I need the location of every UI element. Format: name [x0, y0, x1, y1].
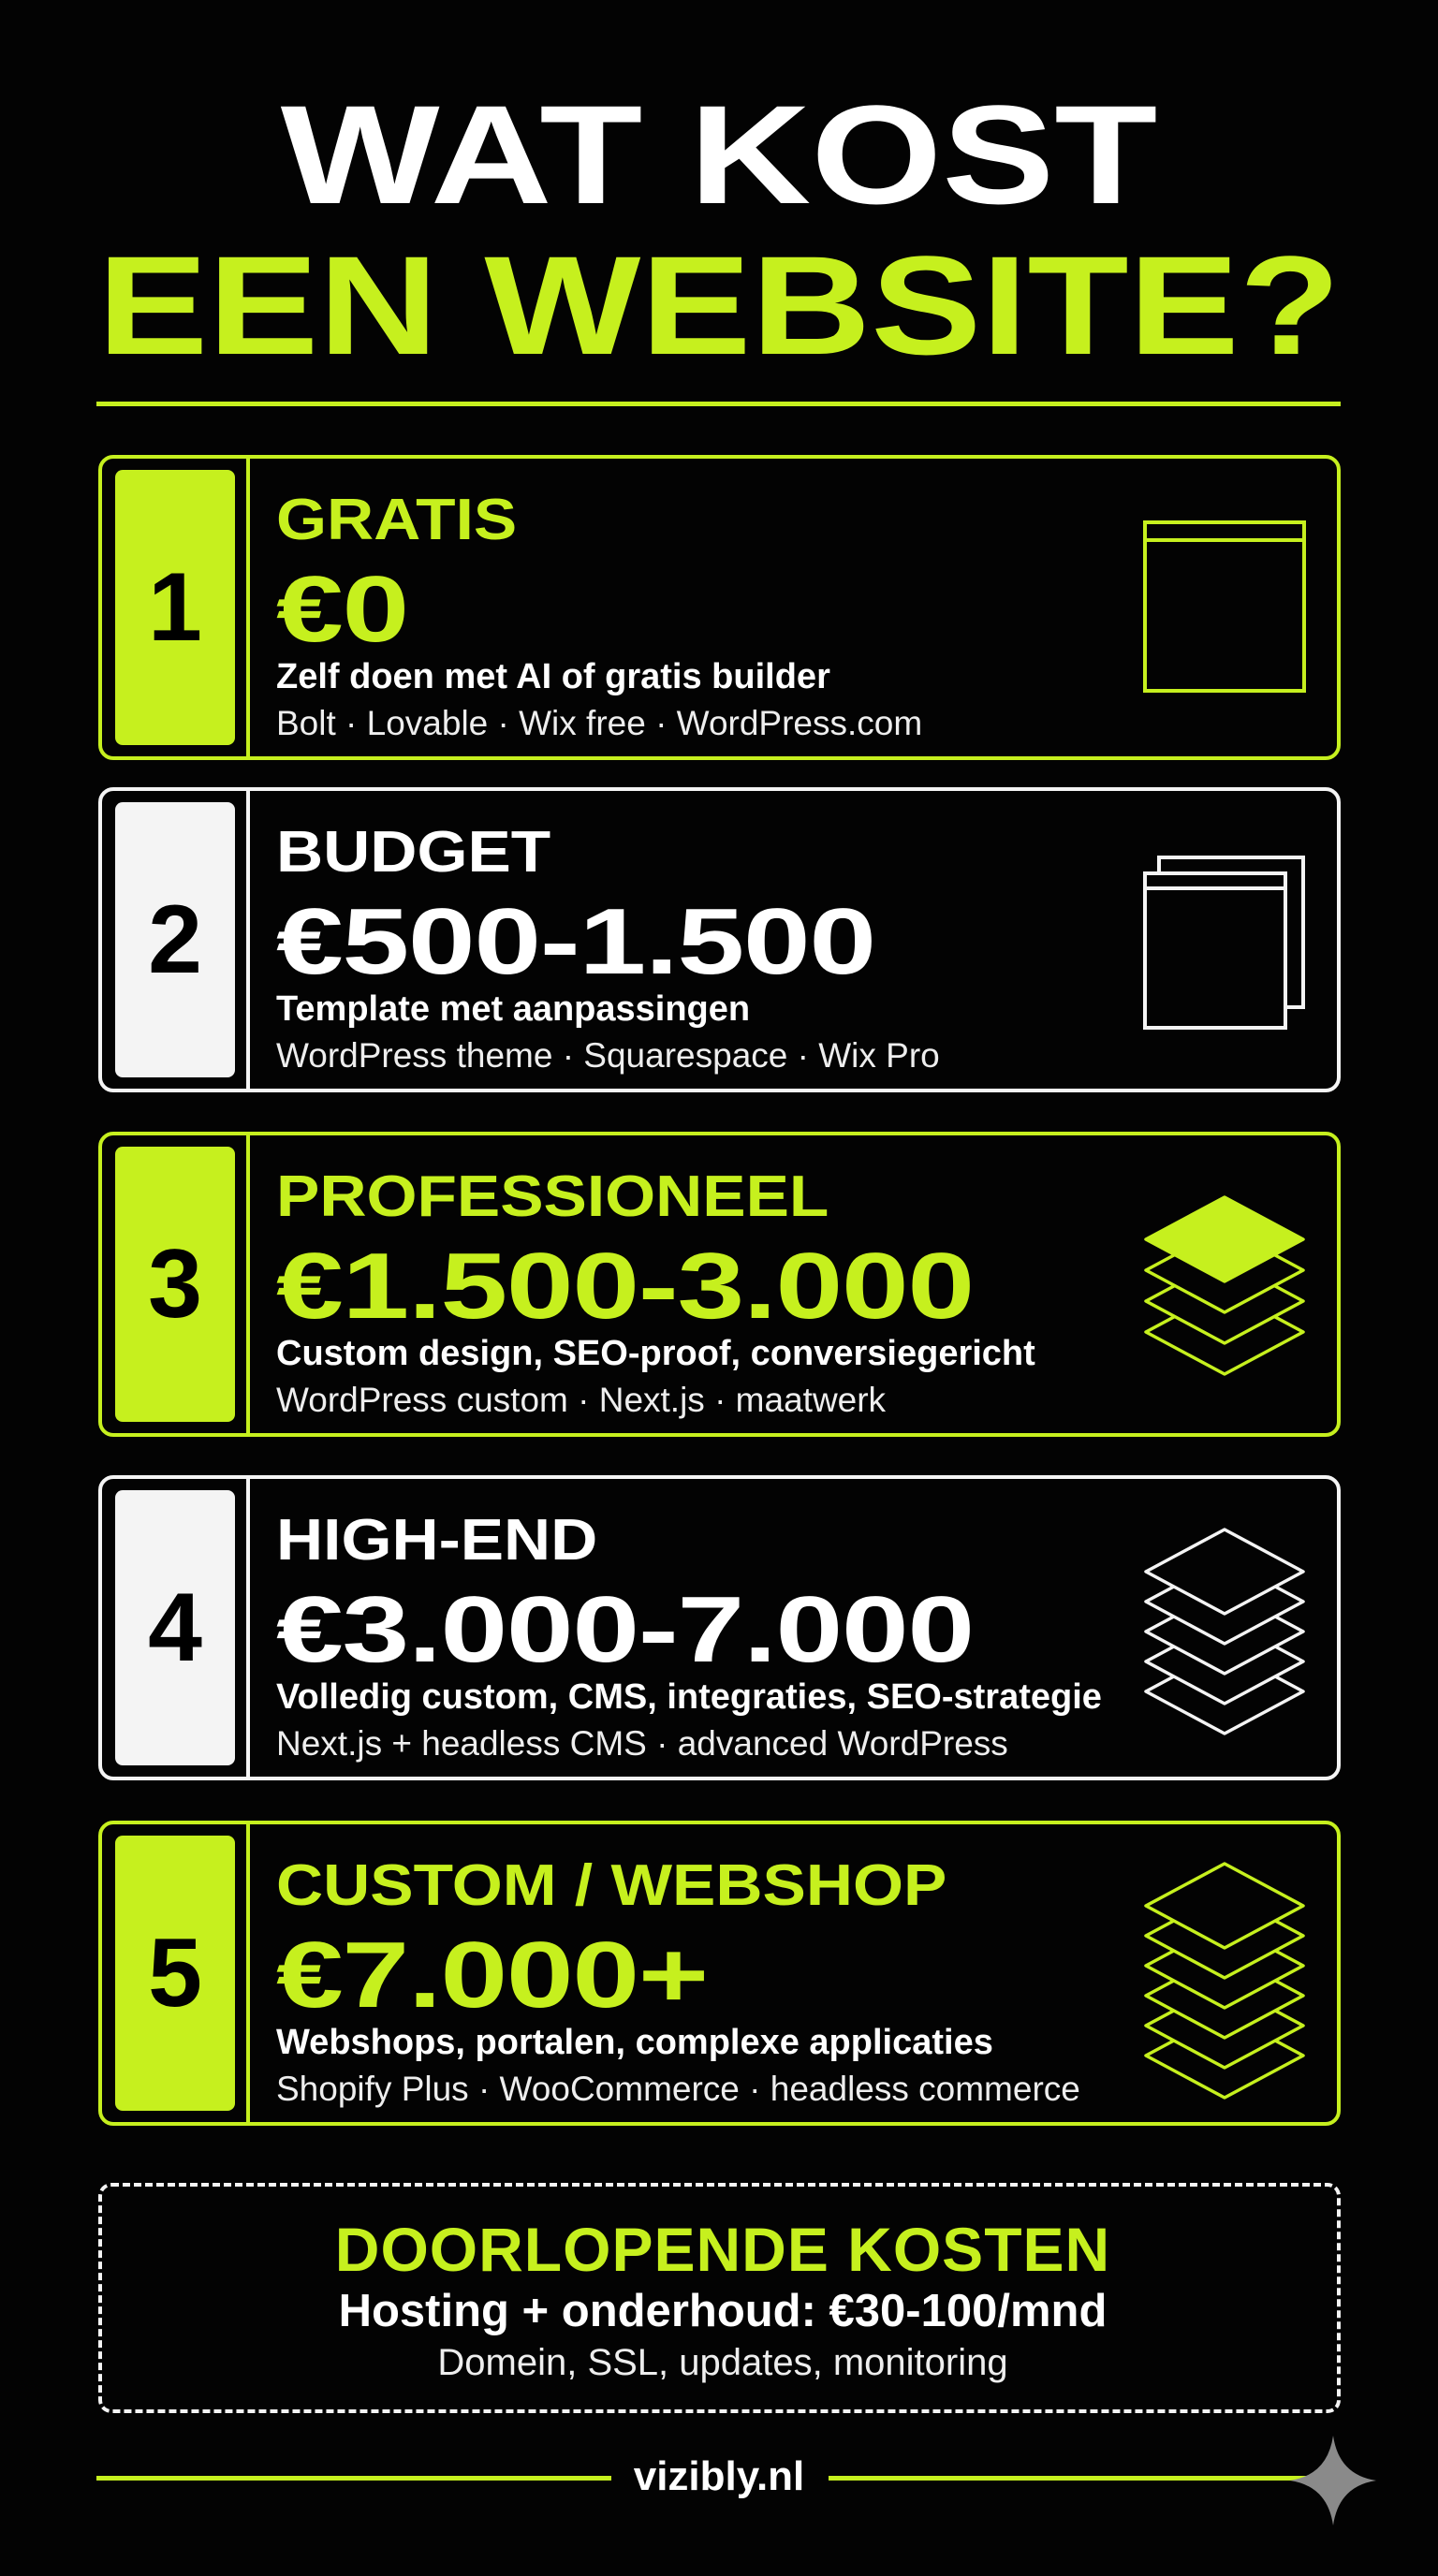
icon: two windows	[1143, 856, 1305, 1030]
panel: card 2 budget	[98, 787, 1341, 1092]
number box 2	[115, 802, 235, 1077]
hosting text: Hosting + onderhoud: €30-100/mnd	[339, 2286, 1107, 2336]
number box 1: 1	[148, 552, 202, 661]
number box 3: 3	[148, 1230, 202, 1339]
icon: layers 4	[1144, 1195, 1305, 1376]
number box 2: 2	[148, 886, 202, 994]
label gratis: GRATIS	[276, 488, 517, 552]
price: €500-1.500	[276, 889, 875, 994]
number box 4: 4	[148, 1573, 202, 1681]
heading: DOORLOPENDE KOSTEN	[335, 2215, 1110, 2284]
description: Volledig custom, CMS, integraties, SEO-strategie	[276, 1677, 1102, 1717]
description: Template met aanpassingen	[276, 989, 750, 1029]
price: €7.000+	[276, 1923, 708, 2027]
footer	[96, 2436, 1376, 2525]
icon: window	[1143, 520, 1306, 693]
number box 4	[115, 1490, 235, 1765]
description: Webshops, portalen, complexe applicaties	[276, 2023, 993, 2062]
tools: Next.js + headless CMS · advanced WordPress	[276, 1724, 1008, 1763]
tools: WordPress custom · Next.js · maatwerk	[276, 1381, 886, 1419]
number box 1	[115, 470, 235, 745]
title line 2: EEN WEBSITE?	[97, 227, 1341, 384]
description: Zelf doen met AI of gratis builder	[276, 657, 830, 696]
label: PROFESSIONEEL	[276, 1164, 829, 1229]
label: CUSTOM / WEBSHOP	[276, 1853, 946, 1918]
price €0: €0	[276, 557, 408, 662]
label budget: BUDGET	[276, 820, 550, 885]
number box 5: 5	[148, 1919, 202, 2027]
title line 1: WAT KOST	[281, 76, 1157, 233]
tools: Bolt · Lovable · Wix free · WordPress.com	[276, 704, 922, 742]
tools: Shopify Plus · WooCommerce · headless commerce	[276, 2070, 1080, 2108]
brand: vizibly.nl	[634, 2453, 804, 2499]
price: €1.500-3.000	[276, 1234, 974, 1339]
price: €3.000-7.000	[276, 1577, 974, 1682]
icon: layers 6	[1144, 1862, 1305, 2100]
tools: WordPress theme · Squarespace · Wix Pro	[276, 1036, 940, 1075]
icon: layers 5	[1144, 1528, 1305, 1735]
description: Custom design, SEO-proof, conversiegericht	[276, 1334, 1035, 1373]
panel: card 5 custom webshop	[98, 1821, 1341, 2126]
details: Domein, SSL, updates, monitoring	[437, 2342, 1008, 2383]
panel: card 1 gratis	[98, 455, 1341, 760]
label: HIGH-END	[276, 1508, 597, 1573]
number box 5	[115, 1836, 235, 2111]
panel: card 4 high-end	[98, 1475, 1341, 1780]
number box 3	[115, 1147, 235, 1422]
icon: sparkle	[1290, 2436, 1376, 2525]
panel: card 3 professioneel	[98, 1132, 1341, 1437]
panel: doorlopende kosten	[98, 2183, 1341, 2413]
